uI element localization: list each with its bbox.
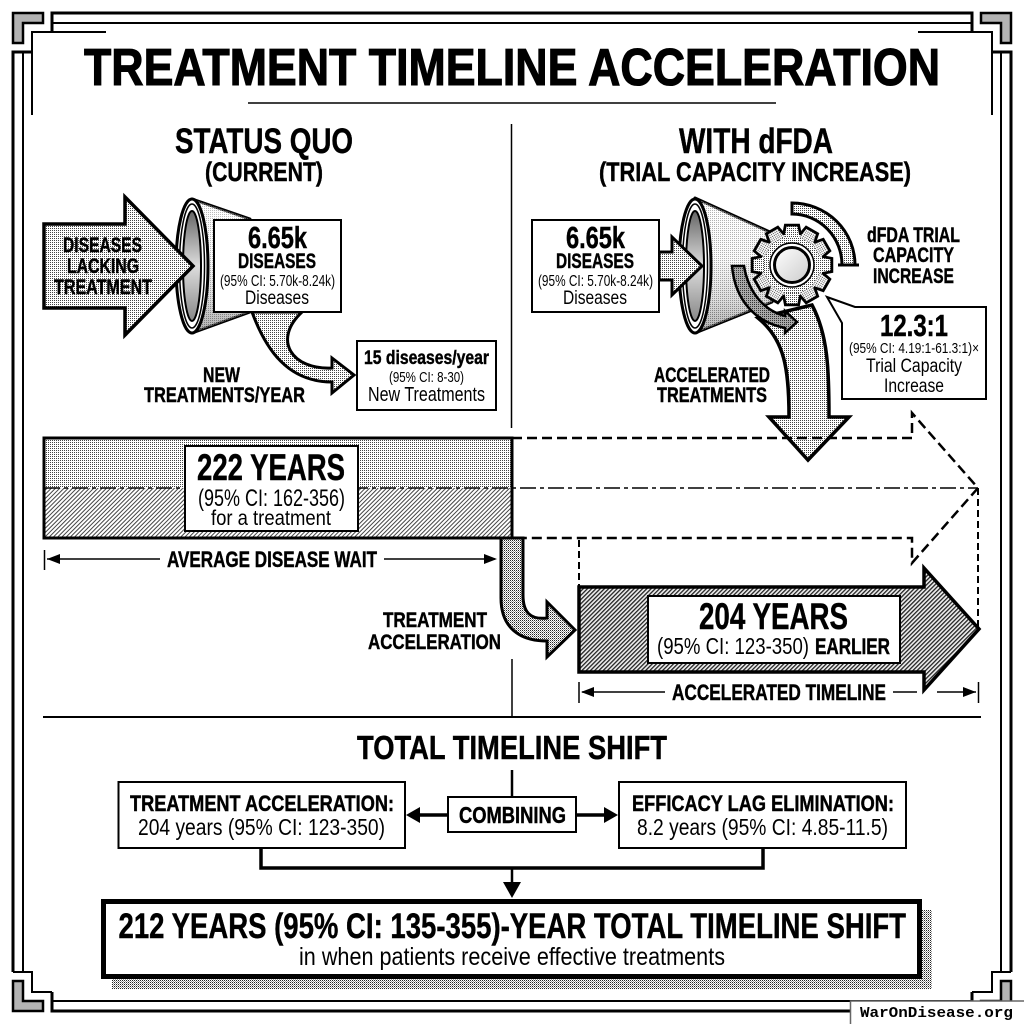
arrow: treatment acceleration (501, 538, 575, 657)
box: diseases count: 6.65k (248, 220, 308, 255)
label: accelerated treatments: ACCELERATED (654, 364, 770, 387)
box: 222 years: 222 YEARS (197, 447, 345, 488)
box: combining (448, 797, 576, 832)
label: diseases lacking treatment: DISEASES (63, 234, 142, 257)
label: diseases lacking treatment: LACKING (67, 255, 139, 278)
box: diseases count (214, 220, 341, 312)
label: treatment acceleration: ACCELERATION (368, 631, 501, 654)
label: treatment acceleration: TREATMENT (383, 609, 487, 632)
label: new treatments per year: TREATMENTS/YEAR (144, 384, 305, 407)
arrow: rotation (792, 203, 859, 265)
icon: funnel (679, 198, 772, 333)
heading: status quo: (CURRENT) (205, 157, 323, 187)
label: dFDA trial capacity increase: CAPACITY (873, 244, 954, 267)
heading: with dFDA: (TRIAL CAPACITY INCREASE) (599, 157, 911, 187)
connectors: combining flow (261, 770, 763, 898)
box: diseases count (532, 220, 659, 312)
icon: gear (754, 226, 830, 304)
label: dFDA trial capacity increase: dFDA TRIAL (867, 224, 960, 247)
dimension: average disease wait: AVERAGE DISEASE WAIT (167, 547, 377, 572)
callout: total timeline shift result: in when patients receive effective treatments (299, 943, 725, 971)
timeline: dashed projected arrow (512, 413, 978, 628)
label: diseases lacking treatment (54, 234, 152, 299)
box: diseases count: Diseases (563, 288, 627, 309)
box: efficacy lag elimination: 8.2 years (95% CI: 4.85-11.5) (637, 814, 888, 840)
box: treatment acceleration: TREATMENT ACCELERATION: (130, 791, 394, 816)
dimension: accelerated timeline: ACCELERATED TIMELINE (672, 680, 886, 705)
heading: with dFDA (599, 122, 911, 187)
callout: total timeline shift result (104, 902, 932, 989)
callout: trial capacity increase: Increase (884, 376, 944, 397)
callout: trial capacity increase: Trial Capacity (866, 356, 962, 377)
timeline: status quo bar (44, 438, 978, 538)
label: new treatments per year (144, 364, 305, 407)
arrow: new treatments (252, 312, 354, 393)
arrow: diseases lacking treatment (44, 197, 193, 335)
box: treatment acceleration (118, 782, 405, 848)
box: 204 years: 204 YEARS (699, 596, 848, 637)
panel: status quo funnel (44, 197, 496, 410)
box: diseases count: Diseases (245, 288, 309, 309)
heading: total timeline shift: TOTAL TIMELINE SHIFT (357, 729, 667, 766)
box: efficacy lag elimination: EFFICACY LAG ELIMINATION: (632, 791, 894, 816)
box: 204 years: (95% CI: 123-350) (657, 633, 809, 659)
box: new treatments (357, 341, 496, 410)
label: diseases lacking treatment: TREATMENT (54, 276, 152, 299)
box: 222 years: (95% CI: 162-356) (198, 485, 345, 512)
arrow: inner gear flow (732, 266, 797, 333)
box: diseases count: DISEASES (238, 250, 316, 273)
callout: trial capacity increase: 12.3:1 (880, 308, 948, 343)
box: 222 years (185, 446, 358, 531)
box: combining: COMBINING (459, 802, 566, 828)
dimension: average disease wait (44, 547, 497, 572)
panel: with dFDA funnel (532, 198, 986, 460)
box: efficacy lag elimination (619, 782, 906, 848)
box: diseases count: DISEASES (556, 250, 634, 273)
arrow: accelerated treatments (758, 305, 849, 460)
box: new treatments: 15 diseases/year (364, 348, 489, 369)
box: diseases count: 6.65k (566, 220, 626, 255)
callout: trial capacity increase (827, 297, 986, 399)
box: treatment acceleration: 204 years (95% CI: 123-350) (138, 814, 385, 840)
box: new treatments: (95% CI: 8-30) (389, 369, 464, 386)
box: diseases count: (95% CI: 5.70k-8.24k) (538, 273, 653, 290)
heading: with dFDA: WITH dFDA (679, 122, 833, 161)
heading: status quo: STATUS QUO (175, 122, 353, 161)
arrow: diseases into funnel (659, 237, 702, 295)
box: 204 years (648, 596, 900, 663)
label: treatment acceleration (368, 609, 501, 654)
label: dFDA trial capacity increase (867, 224, 960, 288)
label: accelerated treatments: TREATMENTS (657, 384, 767, 407)
watermark: WarOnDisease.org (860, 1006, 1013, 1022)
dimension: accelerated timeline (579, 680, 978, 705)
box: 204 years: EARLIER (815, 634, 890, 659)
icon: funnel (176, 199, 250, 333)
heading: status quo (175, 122, 353, 187)
box: 222 years: for a treatment (211, 507, 331, 530)
label: accelerated treatments (654, 364, 770, 407)
watermark (850, 1001, 1024, 1024)
timeline: accelerated arrow (579, 568, 979, 690)
label: dFDA trial capacity increase: INCREASE (873, 265, 954, 288)
callout: trial capacity increase: (95% CI: 4.19:1-61.3:1)× (849, 340, 979, 357)
box: diseases count: (95% CI: 5.70k-8.24k) (220, 273, 335, 290)
label: new treatments per year: NEW (203, 364, 240, 387)
box: new treatments: New Treatments (368, 384, 485, 406)
